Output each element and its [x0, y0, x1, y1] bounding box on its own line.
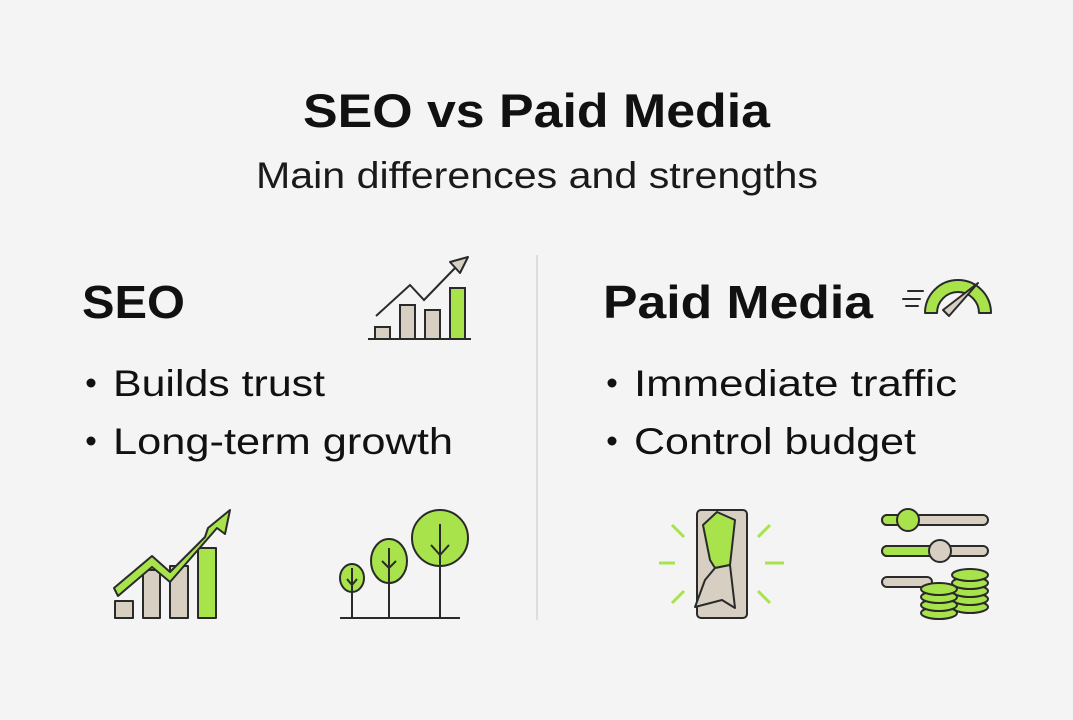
icon: large growth chart [114, 510, 230, 618]
icon: sliders and coins [882, 509, 988, 619]
panel: SEO [82, 257, 471, 618]
heading: Paid Media: Paid Media [603, 276, 873, 328]
bullets: Paid Media: Control budget [634, 421, 917, 462]
heading: SEO: SEO [82, 276, 185, 328]
title: SEO vs Paid Media [303, 84, 771, 137]
panel: Paid Media [603, 276, 991, 619]
bullets: Paid Media: Immediate traffic [634, 363, 957, 404]
bullets: Paid Media [608, 363, 957, 462]
icon: trees [340, 510, 468, 618]
icon: switch [659, 510, 784, 618]
subtitle: Main differences and strengths [256, 155, 818, 196]
bullets: SEO: Builds trust [113, 363, 326, 404]
bullets: SEO [86, 363, 453, 462]
icon: speedometer [903, 280, 991, 316]
icon: small growth chart [368, 257, 471, 339]
bullets: SEO: Long-term growth [113, 421, 453, 462]
